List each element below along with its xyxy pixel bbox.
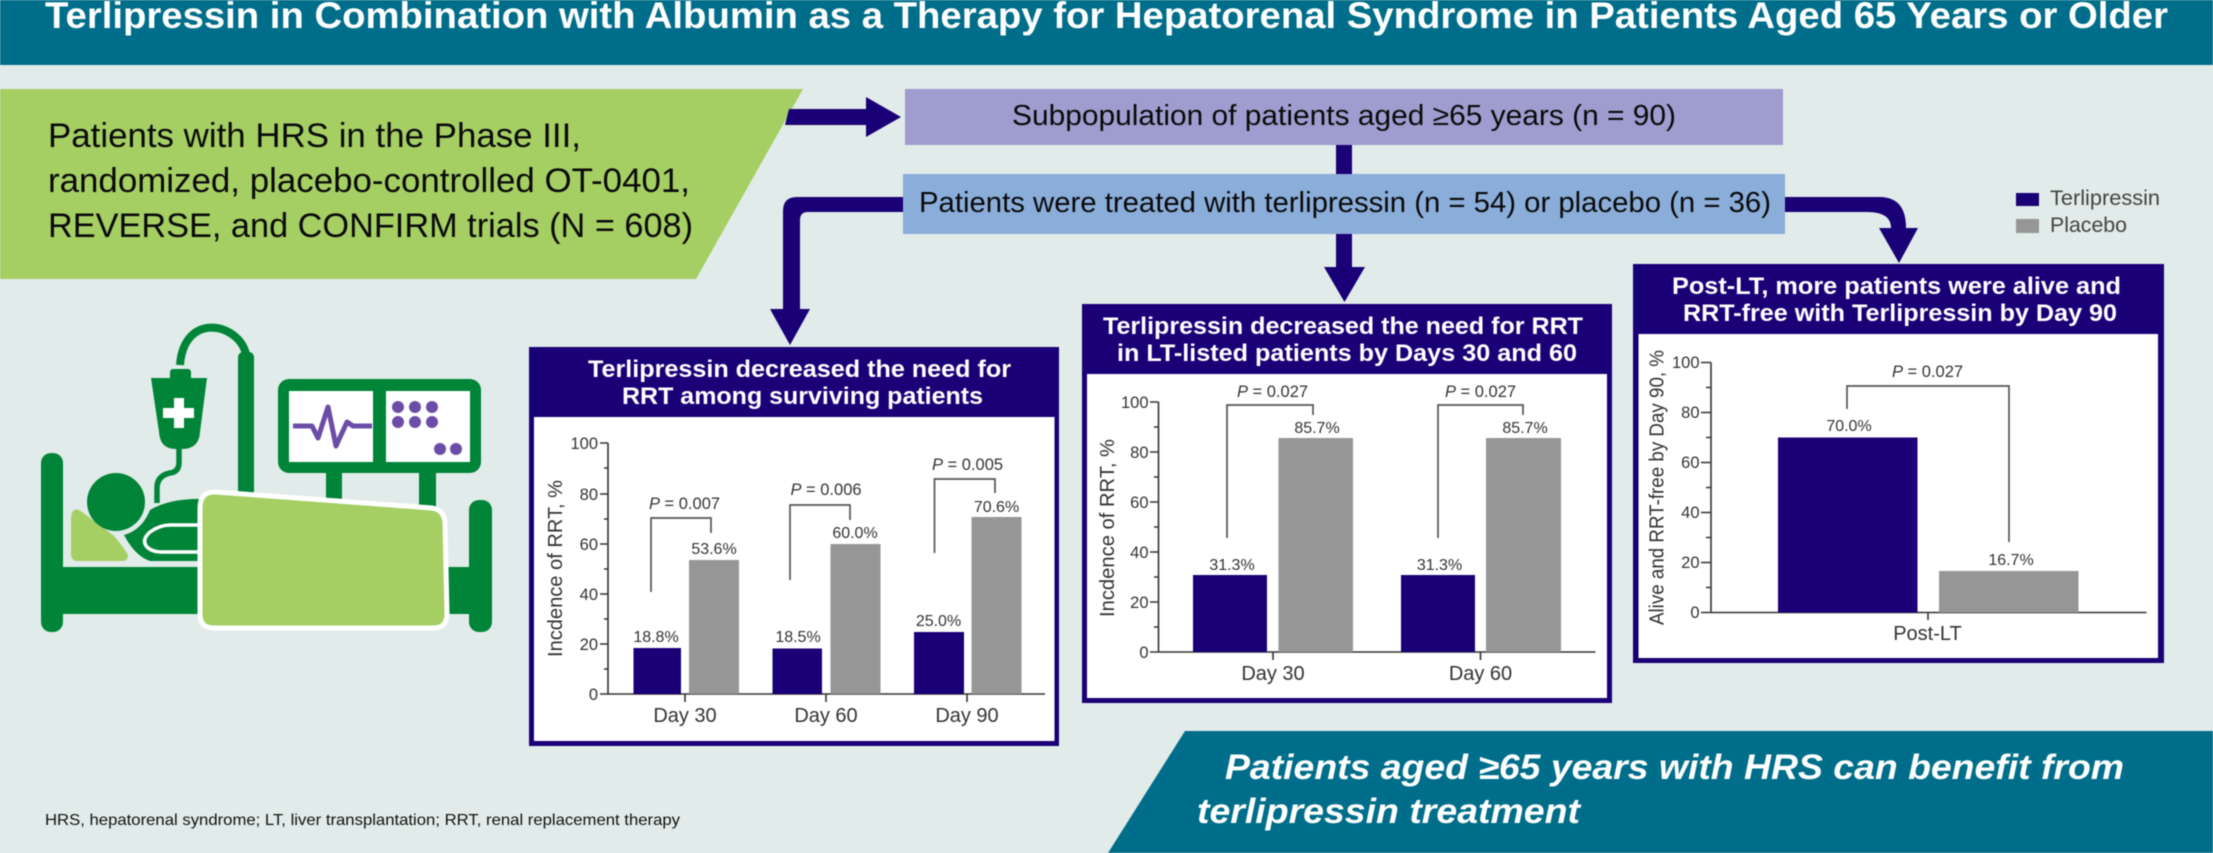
chart 2 axes and ticks: 60: [1130, 494, 1148, 512]
chart 3 axes and ticks: 60: [1681, 454, 1700, 472]
arrow: treatment to chart 2: [1324, 234, 1365, 302]
panel: patient population: [0, 89, 803, 279]
chart 1 axes and ticks: Day 60: [794, 705, 858, 727]
chart 2 value labels: 31.3%: [1209, 557, 1255, 574]
panel: patient population: Patients with HRS in the Phase III,: [48, 117, 581, 155]
panel: patient population: REVERSE, and CONFIRM trials (N = 608): [48, 207, 693, 245]
legend: [2016, 187, 2160, 237]
chart 1 value labels: 60.0%: [832, 525, 878, 542]
chart 2 value labels: [1209, 420, 1548, 574]
connector: subpopulation to treatment: [1336, 145, 1352, 174]
chart 1 value labels: 70.6%: [974, 499, 1019, 516]
chart 3 axes and ticks: [1646, 350, 2146, 645]
legend: Placebo: [2050, 214, 2127, 237]
chart 1 axes and ticks: Day 90: [935, 705, 999, 727]
chart 3 value labels: 70.0%: [1826, 418, 1872, 435]
chart 3 axes and ticks: 100: [1672, 354, 1700, 372]
chart 1 value labels: [633, 499, 1019, 646]
box: treatment groups: Patients were treated with terlipressin (n = 54) or placebo (n = 36): [919, 187, 1771, 219]
chart 3 axes and ticks: 40: [1681, 504, 1700, 522]
chart 3 axes and ticks: 80: [1681, 404, 1700, 422]
chart 2 value labels: 31.3%: [1417, 557, 1462, 574]
chart 1 significance brackets: P = 0.005: [932, 456, 1003, 474]
heading: chart 2: [1103, 313, 1583, 367]
conclusion banner: [1108, 731, 2213, 853]
chart 1 value labels: 18.8%: [633, 629, 679, 646]
chart 1 axes and ticks: [545, 435, 1045, 727]
chart 2 value labels: 85.7%: [1502, 420, 1548, 437]
chart 1 bars: [634, 517, 1022, 694]
chart 1 axes and ticks: Incdence of RRT, %: [545, 480, 567, 657]
chart 1 value labels: 18.5%: [775, 629, 821, 646]
chart 3 value labels: [1826, 418, 2034, 569]
chart 2 axes and ticks: [1097, 394, 1596, 685]
legend: Terlipressin: [2050, 187, 2160, 210]
chart 3 significance bracket: P = 0.027: [1892, 363, 1963, 381]
chart 3 axes and ticks: Alive and RRT-free by Day 90, %: [1646, 350, 1668, 625]
chart 2 axes and ticks: Day 60: [1449, 663, 1512, 685]
chart 2 axes and ticks: Incdence of RRT, %: [1097, 439, 1119, 617]
chart 3 value labels: 16.7%: [1988, 552, 2034, 569]
chart 2 significance brackets: P = 0.027: [1445, 383, 1516, 401]
chart 2 axes and ticks: 0: [1139, 644, 1148, 662]
chart 2 axes and ticks: 20: [1130, 594, 1148, 612]
heading: chart 1: Terlipressin decreased the need for: [588, 356, 1011, 383]
arrow: population to subpopulation: [785, 97, 901, 137]
chart 2 bars: [1193, 438, 1561, 652]
panel: chart 1 RRT among surviving patients: [529, 347, 1059, 746]
chart 3 significance bracket: [1847, 363, 2009, 542]
panel: chart 2 RRT in LT-listed patients: [1082, 304, 1612, 703]
heading: chart 3: RRT-free with Terlipressin by Day 90: [1683, 300, 2117, 327]
chart 1 significance brackets: P = 0.007: [649, 495, 720, 513]
chart 3 axes and ticks: Post-LT: [1893, 623, 1962, 645]
heading: chart 1: RRT among surviving patients: [622, 383, 983, 410]
chart 2 axes and ticks: 100: [1121, 394, 1148, 412]
heading: chart 3: Post-LT, more patients were alive and: [1672, 273, 2121, 300]
chart 2 significance brackets: P = 0.027: [1237, 383, 1308, 401]
heading: chart 2: Terlipressin decreased the need for RRT: [1103, 313, 1583, 340]
chart 1 axes and ticks: Day 30: [653, 705, 717, 727]
icon: patient in hospital bed: [41, 328, 492, 632]
chart 1 axes and ticks: 0: [589, 686, 598, 704]
chart 2 value labels: 85.7%: [1294, 420, 1340, 437]
chart 2 axes and ticks: 80: [1130, 444, 1148, 462]
panel: patient population: randomized, placebo-controlled OT-0401,: [48, 162, 690, 200]
heading: chart 2: in LT-listed patients by Days 30 and 60: [1117, 340, 1577, 367]
heading: chart 3: [1672, 273, 2121, 327]
chart 1 axes and ticks: 100: [570, 435, 598, 453]
chart 1 axes and ticks: 80: [580, 486, 598, 504]
chart 1 value labels: 53.6%: [691, 541, 737, 558]
chart 3 bars: [1778, 438, 2078, 612]
chart 2 axes and ticks: Day 30: [1241, 663, 1305, 685]
conclusion banner: Patients aged ≥65 years with HRS can benefit from: [1225, 748, 2124, 787]
box: subpopulation: [905, 89, 1783, 145]
box: subpopulation: Subpopulation of patients aged ≥65 years (n = 90): [1012, 100, 1676, 132]
chart 2 significance brackets: [1227, 383, 1523, 538]
chart 2 axes and ticks: 40: [1130, 544, 1148, 562]
chart 1 axes and ticks: 20: [580, 636, 598, 654]
chart 3 axes and ticks: 0: [1690, 604, 1700, 622]
footnote: HRS, hepatorenal syndrome; LT, liver transplantation; RRT, renal replacement therapy: [45, 812, 680, 829]
arrow: treatment to chart 3: [1785, 197, 1918, 263]
box: treatment groups: [903, 174, 1785, 234]
heading: chart 1: [588, 356, 1011, 410]
panel: chart 3 post-LT outcomes: [1633, 264, 2164, 663]
conclusion banner: terlipressin treatment: [1197, 792, 1581, 831]
arrow: treatment to chart 1: [770, 197, 903, 345]
chart 3 axes and ticks: 20: [1681, 554, 1700, 572]
chart 1 value labels: 25.0%: [916, 613, 961, 630]
chart 1 significance brackets: P = 0.006: [790, 481, 862, 499]
title banner: [0, 0, 2213, 65]
chart 1 axes and ticks: 60: [580, 536, 598, 554]
chart 1 axes and ticks: 40: [580, 586, 598, 604]
chart 1 significance brackets: [649, 456, 1003, 592]
